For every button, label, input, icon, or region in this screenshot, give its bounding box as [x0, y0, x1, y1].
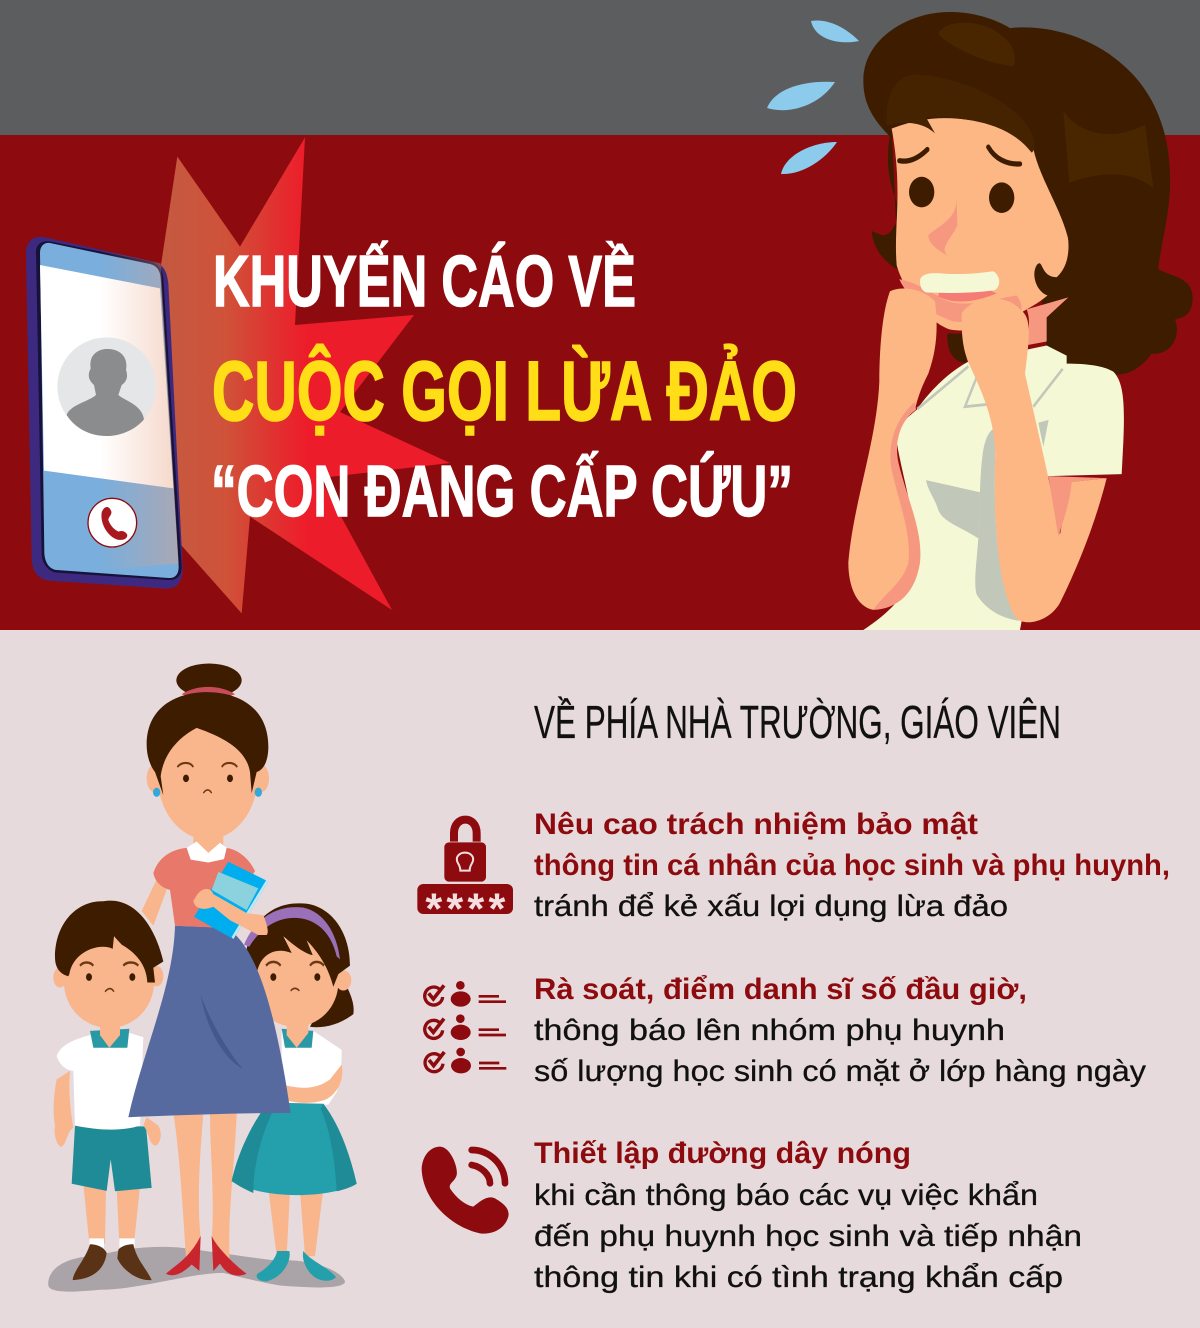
- icon: attendance checklist: [425, 981, 506, 1073]
- text block: roll call: thông báo lên nhóm phụ huynh: [534, 1014, 1005, 1047]
- text block: protect information: Nêu cao trách nhiệm bảo mật: [534, 808, 978, 841]
- icon: smartphone with incoming call: [26, 237, 183, 589]
- title: [211, 241, 797, 532]
- icon: sweat drops: [767, 21, 859, 174]
- red header panel: [0, 135, 1200, 630]
- top gray band: [0, 0, 1200, 135]
- burst star: [160, 137, 450, 613]
- text block: hotline: Thiết lập đường dây nóng: [534, 1137, 911, 1170]
- boy: [53, 901, 163, 1280]
- title: KHUYẾN CÁO VỀ: [213, 241, 636, 322]
- icon: padlock with password: [417, 820, 513, 934]
- text block: roll call: Rà soát, điểm danh sĩ số đầu giờ,: [534, 973, 1027, 1006]
- text block: roll call: [534, 973, 1146, 1088]
- title: “CON ĐANG CẤP CỨU”: [211, 451, 793, 532]
- text block: hotline: khi cần thông báo các vụ việc khẩn: [534, 1179, 1038, 1212]
- teacher body: [128, 663, 291, 1117]
- title: CUỘC GỌI LỪA ĐẢO: [212, 344, 797, 438]
- text block: hotline: [534, 1137, 1082, 1294]
- text block: protect information: [534, 808, 1170, 923]
- text block: protect information: tránh để kẻ xấu lợi dụng lừa đảo: [534, 890, 1008, 923]
- worried woman illustration: [848, 12, 1193, 630]
- text block: protect information: thông tin cá nhân của học sinh và phụ huynh,: [534, 849, 1170, 882]
- icon: hotline phone: [422, 1147, 509, 1234]
- text block: hotline: thông tin khi có tình trạng khẩn cấp: [534, 1261, 1063, 1294]
- teacher and students illustration: [48, 663, 357, 1292]
- text block: roll call: số lượng học sinh có mặt ở lớp hàng ngày: [534, 1055, 1146, 1088]
- text block: hotline: đến phụ huynh học sinh và tiếp nhận: [534, 1220, 1082, 1253]
- lower panel background: [0, 630, 1200, 1328]
- icon: padlock with password: ****: [425, 886, 505, 934]
- girl: [232, 903, 357, 1281]
- teacher legs and shoes: [166, 1113, 247, 1276]
